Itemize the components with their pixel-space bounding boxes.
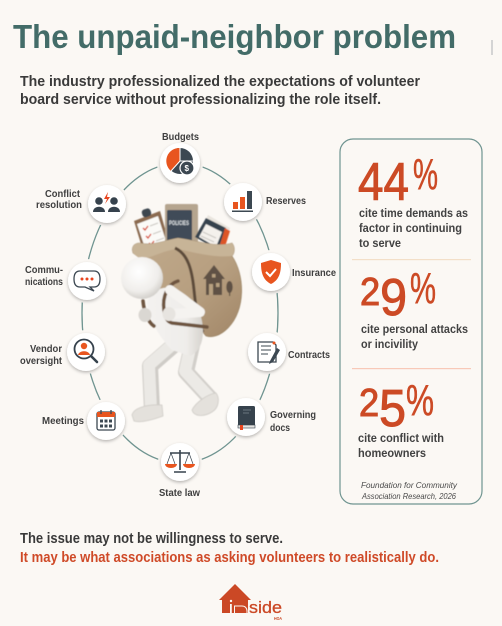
node: state law: State law — [159, 487, 201, 499]
stat: 25 percent: 2 — [359, 381, 379, 424]
icon: bar chart — [232, 191, 253, 212]
icon: binders — [195, 215, 230, 252]
backpack — [132, 238, 242, 337]
icon: clipboard — [134, 208, 170, 254]
node: insurance — [249, 250, 336, 294]
node: vendor oversight — [20, 330, 108, 374]
stat: 29 percent: or incivility — [361, 337, 418, 351]
icon: magnifier with person — [74, 340, 97, 362]
logo: Inside HOA: side — [249, 598, 282, 617]
figure feet — [132, 393, 218, 422]
source note: Association Research, 2026 — [361, 491, 456, 501]
subtitle — [20, 74, 420, 108]
stat: 44 percent: % — [413, 150, 438, 199]
figure legs — [149, 344, 210, 410]
backpack straps — [143, 281, 207, 327]
icon: policies book: POLICIES — [169, 221, 189, 227]
figure carrying overloaded bag — [121, 204, 242, 422]
icon: scales — [165, 450, 195, 472]
icon: pie chart with coin: $ — [184, 164, 190, 173]
icon: contract and pen — [258, 342, 280, 364]
subtitle: board service without professionalizing the role itself. — [20, 92, 381, 108]
panel: statistics — [340, 139, 482, 504]
node: governing docs: docs — [270, 422, 290, 434]
source note — [361, 480, 458, 501]
node: contracts: Contracts — [288, 349, 330, 361]
node: communications: Commu- — [25, 264, 63, 276]
stat: 25 percent: homeowners — [358, 446, 426, 460]
node: vendor oversight: oversight — [20, 355, 62, 367]
node: meetings: Meetings — [42, 415, 84, 427]
stat: 44 percent: to serve — [359, 236, 401, 250]
stat: 29 percent: 9 — [380, 268, 407, 326]
title: The unpaid-neighbor problem — [13, 18, 456, 55]
node: state law — [158, 440, 202, 499]
stat: 25 percent — [358, 376, 444, 460]
node: budgets: Budgets — [162, 131, 199, 143]
stat: 29 percent: cite personal attacks — [361, 322, 468, 336]
icon: book — [238, 406, 255, 430]
source note: Foundation for Community — [361, 480, 458, 490]
ring connecting responsibilities — [82, 163, 278, 463]
subtitle: The industry professionalized the expectations of volunteer — [20, 74, 420, 90]
stat: 25 percent: 5 — [379, 379, 406, 437]
node: contracts — [245, 330, 330, 374]
node: reserves: Reserves — [266, 195, 306, 207]
node: reserves — [221, 180, 306, 224]
closing statement — [20, 531, 439, 566]
stat: 25 percent: % — [406, 376, 434, 425]
figure head — [121, 257, 163, 299]
icon: calendar — [97, 410, 115, 430]
stat: 44 percent — [358, 150, 468, 250]
stat: 44 percent: factor in continuing — [359, 221, 462, 235]
stat: 44 percent: cite time demands as — [359, 206, 468, 220]
stat: 25 percent: cite conflict with — [358, 431, 444, 445]
node: conflict resolution — [36, 182, 129, 226]
logo: Inside HOA: HOA — [274, 616, 283, 621]
node: governing docs: Governing — [270, 409, 316, 421]
icon: shield — [261, 260, 281, 284]
node: insurance: Insurance — [292, 267, 336, 279]
node: communications: nications — [25, 276, 63, 288]
node: governing docs — [224, 395, 316, 439]
node: communications — [25, 259, 109, 303]
stat: 29 percent: % — [410, 264, 436, 313]
closing statement: The issue may not be willingness to serve. — [20, 531, 283, 547]
closing statement: It may be what associations as asking volunteers to realistically do. — [20, 550, 439, 566]
logo: Inside HOA — [219, 584, 283, 621]
stat: 29 percent: 2 — [360, 270, 380, 313]
stat: 44 percent: 44 — [358, 153, 409, 212]
icon: speech bubble — [74, 271, 100, 291]
node: vendor oversight: Vendor — [30, 343, 62, 355]
node: meetings — [42, 399, 128, 443]
figure arm and hands — [138, 290, 200, 322]
node: conflict resolution: Conflict — [45, 188, 80, 200]
icon: policies book — [165, 204, 198, 246]
node: budgets — [157, 131, 203, 186]
stat: 29 percent — [360, 264, 468, 351]
figure torso — [147, 288, 203, 356]
node: conflict resolution: resolution — [36, 199, 82, 211]
icon: house on bag — [203, 265, 233, 296]
icon: two people with lightning — [93, 192, 120, 212]
